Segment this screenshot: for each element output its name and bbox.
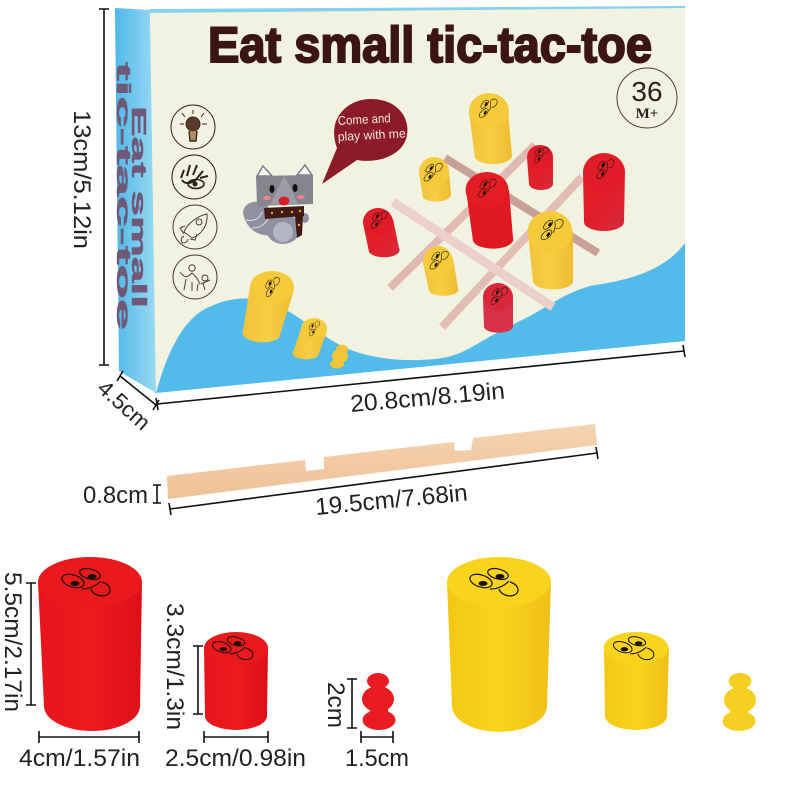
red large width dimension: 4cm/1.57in [19,745,140,772]
red medium width dimension: 2.5cm/0.98in [165,745,306,772]
yellow mini pawn [722,673,756,731]
icon: light bulb [171,105,215,149]
dimension: box width [156,345,685,418]
red large width dimension [19,731,140,772]
yellow small lower [423,246,458,296]
scarf [264,206,304,219]
speech bubble [322,99,407,184]
red medium cylinder [204,632,268,730]
red large cylinder [38,557,142,731]
yellow large right [528,211,573,289]
red mini width dimension [345,731,409,772]
red small top right [527,143,553,190]
age badge [617,68,677,128]
yellow medium on wave [292,318,327,359]
age badge: 36 [631,76,663,107]
yellow large top [469,93,512,164]
dimension: box height: 13cm/5.12in [68,110,95,249]
speech bubble: Come and [337,111,391,128]
red small bottom [483,283,513,333]
title: Eat small tic-tac-toe [208,17,652,73]
red medium height dimension: 3.3cm/1.3in [161,603,188,730]
game pieces on box [242,93,625,368]
red mini pawn [362,673,396,730]
yellow mini on wave [330,344,348,368]
dimension: box depth: 4.5cm [93,375,155,435]
dimension: box height [68,9,109,365]
arms [301,213,309,223]
age badge: M+ [636,106,658,122]
dimension: stick length: 19.5cm/7.68in [314,479,469,521]
box side panel [112,8,156,393]
red mini height dimension: 2cm [322,682,349,728]
tail [243,202,275,236]
side text: tic-tac-toe: tic-tac-toe [112,62,133,330]
yellow large cylinder [447,557,551,732]
icon: rocket [173,205,217,249]
box front panel [150,7,685,393]
red mini width dimension: 1.5cm [345,745,409,772]
red small left [363,207,400,257]
side text: Eat small: Eat small [127,106,149,308]
dimension: box width: 20.8cm/8.19in [349,378,506,418]
yellow medium cylinder [604,632,669,730]
yellow large on wave [242,271,294,342]
blue wave [156,243,685,393]
top edge [150,6,685,13]
speech bubble: play with me [337,126,406,144]
raccoon mascot [243,165,313,244]
red medium width dimension [165,731,306,772]
icon: hand and eye [172,155,216,199]
icon: parent and child [173,255,217,299]
dimension: stick length [169,447,598,521]
dimension: stick thickness: 0.8cm [83,482,148,509]
head [256,175,313,206]
product box [112,6,685,393]
yellow small left [419,157,451,202]
tic-tac-toe wooden grid [390,145,598,327]
red large right [583,153,625,231]
body [266,214,300,244]
ears [257,166,272,176]
red medium height dimension [161,603,203,730]
wooden stick [167,424,597,499]
red large center [466,172,513,249]
